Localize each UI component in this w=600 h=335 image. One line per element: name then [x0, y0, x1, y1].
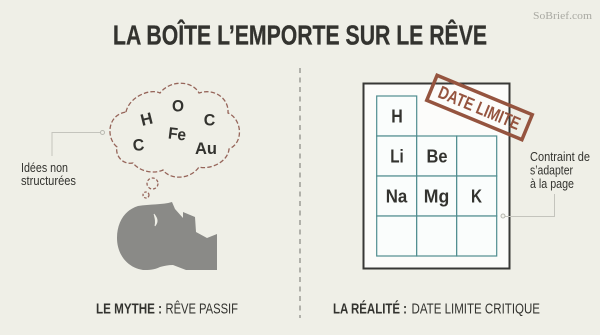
- callout: page constraint: à la page: [530, 177, 574, 191]
- caption: myth: LE MYTHE :: [96, 300, 162, 318]
- cloud elements: C: [204, 112, 215, 130]
- icon: sleeping head: [117, 202, 217, 270]
- title: LA BOÎTE L’EMPORTE SUR LE RÊVE: [113, 20, 487, 50]
- page frame: [364, 84, 510, 268]
- panel: reality: [333, 75, 590, 318]
- thought cloud: [110, 83, 239, 198]
- callout: ideas: structurées: [21, 174, 76, 188]
- element grid: [377, 96, 497, 256]
- cloud elements: O: [172, 98, 184, 116]
- cloud elements: Fe: [167, 125, 187, 145]
- stamp: date limite: [427, 75, 532, 140]
- panel: myth: [21, 83, 239, 318]
- element symbols: Be: [426, 146, 448, 166]
- caption: reality: LA RÉALITÉ :: [333, 300, 407, 318]
- element symbols: K: [471, 186, 482, 206]
- callout: ideas: [21, 130, 104, 188]
- element symbols: Na: [386, 186, 408, 206]
- element symbols: H: [391, 106, 403, 126]
- callout: page constraint: [501, 150, 590, 218]
- cloud elements: [132, 98, 217, 158]
- watermark: SoBrief.com: [533, 11, 592, 22]
- element symbols: Li: [390, 146, 404, 166]
- cloud elements: H: [139, 109, 155, 130]
- caption: myth: [96, 300, 238, 318]
- element symbols: Mg: [424, 186, 449, 206]
- cloud elements: Au: [195, 140, 217, 158]
- caption: reality: [333, 300, 540, 318]
- callout: page constraint: s’adapter: [530, 164, 573, 178]
- stamp: date limite: DATE LIMITE: [435, 82, 523, 134]
- element symbols: [386, 106, 482, 206]
- caption: reality: DATE LIMITE CRITIQUE: [412, 300, 540, 318]
- callout: ideas: Idées non: [21, 161, 68, 175]
- caption: myth: RÊVE PASSIF: [166, 300, 238, 318]
- callout: page constraint: Contraint de: [530, 150, 590, 164]
- cloud elements: C: [132, 136, 145, 155]
